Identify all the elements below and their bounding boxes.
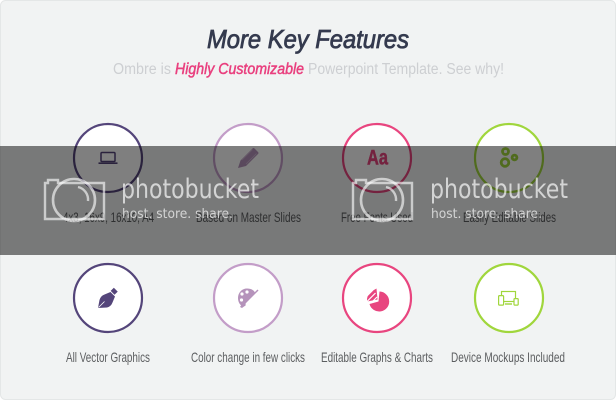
text: photobucket: photobucket <box>430 174 568 205</box>
feature: easily editable slides <box>463 124 556 225</box>
label: graphs and charts: Editable Graphs & Charts <box>321 349 433 365</box>
subtitle <box>113 61 504 78</box>
text: photobucket: photobucket <box>121 174 259 205</box>
label: color change: Color change in few clicks <box>191 349 305 365</box>
icon: pencil <box>238 148 258 168</box>
watermark: left photobucket logo <box>45 174 259 222</box>
feature: device mockups <box>451 264 565 365</box>
watermark: right photobucket logo <box>353 174 568 222</box>
label: free fonts: Free Fonts Used <box>341 209 413 225</box>
subtitle: Powerpoint Template. See why! <box>308 61 504 78</box>
feature: 4x3, 16x9, 16x10, A4 <box>63 124 154 225</box>
title: More Key Features <box>207 24 409 54</box>
feature: all vector graphics <box>66 264 150 365</box>
icon: pie chart <box>365 288 389 311</box>
watermark band <box>0 146 616 255</box>
label: master slides: Based on Master Slides <box>196 209 301 225</box>
icon: pen nib <box>98 288 118 308</box>
icon: devices <box>499 292 518 305</box>
icon: camera outline <box>45 179 104 221</box>
feature: based on master slides <box>196 124 301 225</box>
feature: free fonts used <box>341 124 413 225</box>
feature: color change <box>191 264 305 365</box>
icon: gears <box>501 148 517 166</box>
subtitle: Ombre is <box>113 61 171 78</box>
icon: laptop <box>98 152 118 163</box>
feature: editable graphs and charts <box>321 264 433 365</box>
label: vector graphics: All Vector Graphics <box>66 349 150 365</box>
label: editable slides: Easily Editable Slides <box>463 209 556 225</box>
text: host store share: host. store. share. <box>431 206 542 222</box>
icon: palette and brush <box>238 288 258 308</box>
icon: camera outline <box>353 179 412 221</box>
text: host store share: host. store. share. <box>122 206 233 222</box>
icon: Aa glyph: Aa <box>367 146 388 170</box>
subtitle: Highly Customizable <box>175 61 304 78</box>
label: device mockups: Device Mockups Included <box>451 349 565 365</box>
label: aspect ratios: 4x3, 16x9, 16x10, A4 <box>63 209 154 225</box>
